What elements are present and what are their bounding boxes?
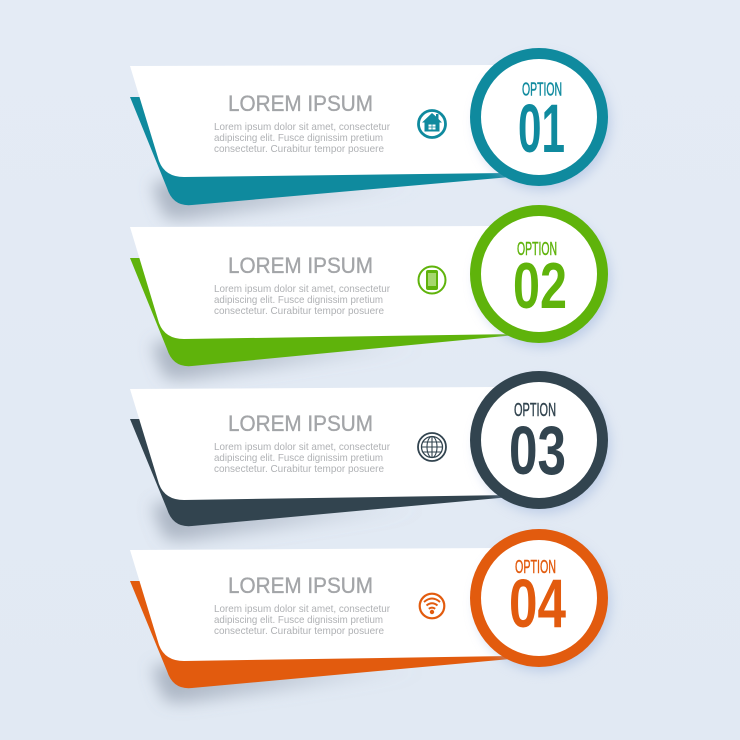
white banner xyxy=(130,226,515,339)
white banner xyxy=(130,387,510,500)
icon: home xyxy=(418,110,446,138)
option 1 row xyxy=(130,54,610,220)
circle badge: OPTION xyxy=(517,239,557,259)
circle badge: OPTION xyxy=(515,557,556,577)
circle badge: 02 xyxy=(513,249,567,322)
colored ribbon xyxy=(130,258,515,366)
heading: LOREM IPSUM xyxy=(228,91,373,116)
body text: adipiscing elit. Fusce dignissim pretium xyxy=(214,614,383,626)
banner shadow xyxy=(152,341,430,380)
body text: Lorem ipsum dolor sit amet, consectetur xyxy=(214,283,390,295)
icon: wifi xyxy=(420,594,444,618)
banner shadow xyxy=(152,180,430,220)
heading: LOREM IPSUM xyxy=(228,411,373,436)
heading: LOREM IPSUM xyxy=(228,573,373,598)
circle badge xyxy=(476,534,610,671)
colored ribbon xyxy=(130,97,510,205)
circle badge xyxy=(476,210,610,347)
body text xyxy=(214,283,390,317)
body text: Lorem ipsum dolor sit amet, consectetur xyxy=(214,603,390,615)
circle badge: OPTION xyxy=(514,400,556,420)
body text: consectetur. Curabitur tempor posuere xyxy=(214,463,384,475)
body text: adipiscing elit. Fusce dignissim pretium xyxy=(214,452,383,464)
body text: consectetur. Curabitur tempor posuere xyxy=(214,143,384,155)
icon: globe xyxy=(418,433,446,461)
icon: phone xyxy=(418,266,446,294)
white banner xyxy=(130,65,505,177)
option 4 row xyxy=(130,534,610,703)
option 3 row xyxy=(130,376,610,541)
body text xyxy=(214,441,390,475)
option 2 row xyxy=(130,210,610,380)
circle badge: 04 xyxy=(509,565,566,642)
circle badge: 03 xyxy=(509,412,566,489)
body text: adipiscing elit. Fusce dignissim pretium xyxy=(214,294,383,306)
banner shadow xyxy=(152,502,430,541)
circle badge: 01 xyxy=(518,90,565,167)
circle badge: OPTION xyxy=(522,80,562,100)
circle badge xyxy=(476,54,610,190)
body text: Lorem ipsum dolor sit amet, consectetur xyxy=(214,441,390,453)
body text: Lorem ipsum dolor sit amet, consectetur xyxy=(214,121,390,133)
body text xyxy=(214,121,390,155)
banner shadow xyxy=(152,664,430,703)
body text: adipiscing elit. Fusce dignissim pretium xyxy=(214,132,383,144)
colored ribbon xyxy=(130,419,510,526)
body text: consectetur. Curabitur tempor posuere xyxy=(214,625,384,637)
heading: LOREM IPSUM xyxy=(228,253,373,278)
circle badge xyxy=(476,376,610,513)
colored ribbon xyxy=(130,581,510,688)
body text xyxy=(214,603,390,637)
white banner xyxy=(130,548,510,661)
body text: consectetur. Curabitur tempor posuere xyxy=(214,305,384,317)
